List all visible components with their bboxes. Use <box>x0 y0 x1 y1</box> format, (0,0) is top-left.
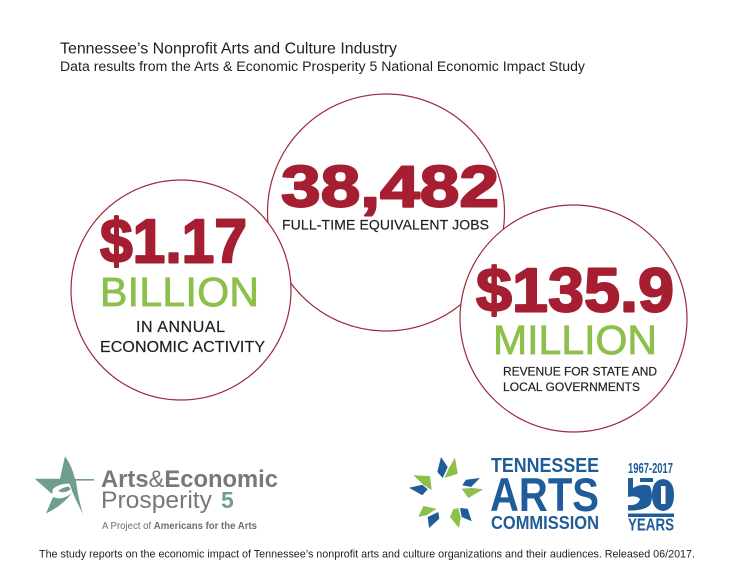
anniversary dates: 1967-2017 <box>628 460 673 477</box>
years label: YEARS <box>628 514 674 534</box>
activity label: IN ANNUAL <box>136 319 225 336</box>
million unit: MILLION <box>493 317 657 363</box>
page heading <box>60 40 585 74</box>
activity label: ECONOMIC ACTIVITY <box>100 339 265 356</box>
activity amount: $1.17 <box>100 208 247 276</box>
stat circle: jobs <box>268 94 504 331</box>
logo: 50 years <box>628 460 674 534</box>
wordmark: Commission: COMMISSION <box>491 513 599 533</box>
jobs label: FULL-TIME EQUIVALENT JOBS <box>282 216 489 232</box>
subtitle: Data results from the Arts & Economic Prosperity 5 National Economic Impact Study <box>60 59 585 74</box>
activity label <box>100 319 265 356</box>
revenue label: REVENUE FOR STATE AND <box>503 364 657 378</box>
icon: numeral 50 <box>628 478 674 517</box>
footer note: The study reports on the economic impact of Tennessee’s nonprofit arts and culture organizations and their audiences. Released 06/2017. <box>39 548 695 560</box>
wordmark line one: Arts&Economic <box>101 466 278 493</box>
title: Tennessee’s Nonprofit Arts and Culture Industry <box>60 40 397 58</box>
billion unit: BILLION <box>100 269 259 315</box>
stat circle: economic activity <box>71 180 291 400</box>
jobs number: 38,482 <box>281 154 499 220</box>
logo: Arts & Economic Prosperity 5 <box>35 456 278 532</box>
wordmark line two: Prosperity <box>101 487 212 514</box>
revenue amount: $135.9 <box>476 256 674 326</box>
revenue label <box>503 364 657 394</box>
logo: Tennessee Arts Commission <box>409 455 599 533</box>
numeral 5: 5 <box>221 487 234 513</box>
revenue label: LOCAL GOVERNMENTS <box>503 380 640 394</box>
stat circle: government revenue <box>460 205 687 432</box>
tagline: A Project of Americans for the Arts <box>102 520 257 532</box>
wordmark: Tennessee: TENNESSEE <box>491 455 599 477</box>
wordmark: Arts: ARTS <box>490 468 599 521</box>
icon: star <box>35 456 94 514</box>
icon: pinwheel <box>409 457 483 528</box>
